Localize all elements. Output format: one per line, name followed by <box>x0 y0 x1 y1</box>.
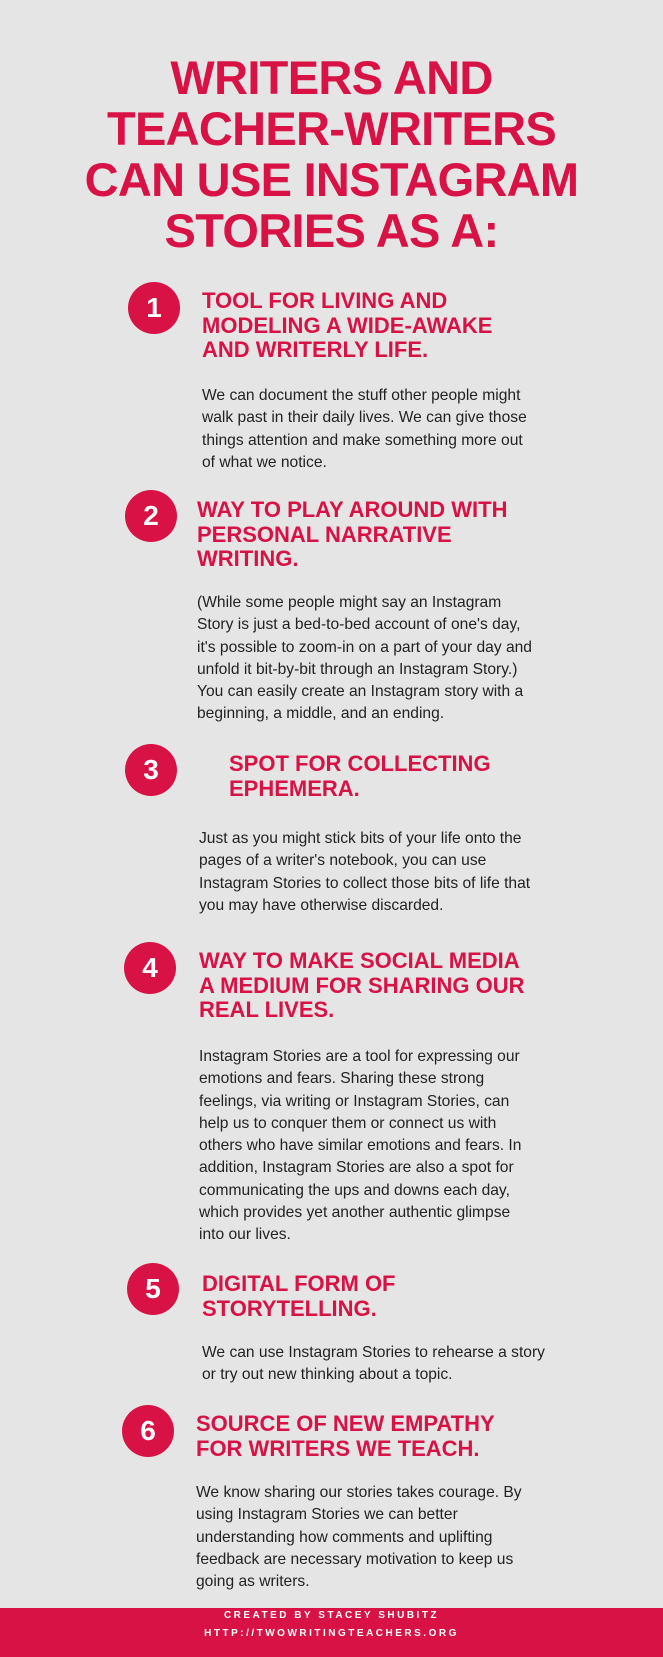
icon: number 5 <box>127 1263 179 1315</box>
body 2: (While some people might say an Instagram <box>197 594 501 611</box>
heading 4: WAY TO MAKE SOCIAL MEDIA <box>199 948 520 973</box>
body 3 <box>199 830 530 914</box>
body 4: addition, Instagram Stories are also a spot for <box>199 1159 514 1176</box>
footer <box>0 1608 663 1657</box>
body 2 <box>197 594 532 722</box>
icon: number 5: 5 <box>145 1273 161 1304</box>
icon: number 2: 2 <box>143 500 159 531</box>
body 6: using Instagram Stories we can better <box>196 1506 458 1523</box>
icon: number 1: 1 <box>146 292 162 323</box>
title: WRITERS AND <box>170 51 493 104</box>
icon: number 4: 4 <box>142 952 158 983</box>
heading 6: FOR WRITERS WE TEACH. <box>196 1436 480 1460</box>
body 1: We can document the stuff other people might <box>202 387 520 404</box>
body 6: We know sharing our stories takes courage. By <box>196 1484 522 1501</box>
body 4: which provides yet another authentic glimpse <box>199 1204 510 1221</box>
heading 6 <box>196 1411 495 1460</box>
body 4: Instagram Stories are a tool for expressing our <box>199 1048 520 1065</box>
body 2: You can easily create an Instagram story with a <box>197 683 523 700</box>
body 4: help us to conquer them or connect us with <box>199 1115 496 1132</box>
icon: number 4 <box>124 942 176 994</box>
icon: number 1 <box>128 282 180 334</box>
body 2: it's possible to zoom-in on a part of your day and <box>197 639 532 656</box>
heading 2: PERSONAL NARRATIVE <box>197 522 452 546</box>
heading 4: REAL LIVES. <box>199 997 334 1022</box>
heading 2: WAY TO PLAY AROUND WITH <box>197 497 508 522</box>
heading 6: SOURCE OF NEW EMPATHY <box>196 1411 495 1436</box>
heading 1 <box>202 288 492 362</box>
title: TEACHER-WRITERS <box>107 102 556 155</box>
title <box>85 51 578 257</box>
body 5: or try out new thinking about a topic. <box>202 1366 453 1383</box>
heading 5: DIGITAL FORM OF <box>202 1271 396 1296</box>
body 6: understanding how comments and uplifting <box>196 1529 492 1546</box>
body 4: emotions and fears. Sharing these strong <box>199 1070 484 1087</box>
heading 2: WRITING. <box>197 546 298 571</box>
body 5 <box>202 1344 545 1383</box>
icon: number 6 <box>122 1405 174 1457</box>
body 3: Just as you might stick bits of your life onto the <box>199 830 521 847</box>
title: CAN USE INSTAGRAM <box>85 153 578 206</box>
body 5: We can use Instagram Stories to rehearse a story <box>202 1344 545 1361</box>
footer: CREATED BY STACEY SHUBITZ <box>224 1610 439 1621</box>
heading 2 <box>197 497 508 571</box>
icon: number 3: 3 <box>143 754 159 785</box>
icon: number 2 <box>125 490 177 542</box>
body 1: of what we notice. <box>202 454 327 471</box>
body 2: unfold it bit-by-bit through an Instagram Story.) <box>197 661 517 678</box>
title: STORIES AS A: <box>165 204 498 257</box>
body 6: going as writers. <box>196 1573 310 1590</box>
heading 1: MODELING A WIDE-AWAKE <box>202 312 492 338</box>
heading 4 <box>199 948 525 1022</box>
body 4: into our lives. <box>199 1226 291 1243</box>
body 6: feedback are necessary motivation to keep us <box>196 1551 513 1568</box>
heading 5 <box>202 1271 396 1320</box>
body 2: Story is just a bed-to-bed account of one's day, <box>197 616 520 633</box>
body 4 <box>199 1048 521 1243</box>
heading 4: A MEDIUM FOR SHARING OUR <box>199 972 525 998</box>
heading 1: TOOL FOR LIVING AND <box>202 288 447 313</box>
body 3: you may have otherwise discarded. <box>199 897 443 914</box>
footer: HTTP://TWOWRITINGTEACHERS.ORG <box>204 1628 459 1639</box>
body 3: pages of a writer's notebook, you can use <box>199 852 486 869</box>
heading 3: SPOT FOR COLLECTING <box>229 751 491 776</box>
body 4: others who have similar emotions and fears. In <box>199 1137 521 1154</box>
body 4: communicating the ups and downs each day, <box>199 1182 510 1199</box>
heading 3 <box>229 751 491 800</box>
body 1: things attention and make something more out <box>202 432 523 449</box>
body 4: feelings, via writing or Instagram Stories, can <box>199 1093 509 1110</box>
body 1: walk past in their daily lives. We can give those <box>202 409 527 426</box>
heading 3: EPHEMERA. <box>229 776 360 800</box>
heading 1: AND WRITERLY LIFE. <box>202 337 428 362</box>
heading 5: STORYTELLING. <box>202 1296 377 1320</box>
icon: number 6: 6 <box>140 1415 156 1446</box>
body 2: beginning, a middle, and an ending. <box>197 705 444 722</box>
icon: number 3 <box>125 744 177 796</box>
body 1 <box>202 387 527 471</box>
body 6 <box>196 1484 522 1590</box>
body 3: Instagram Stories to collect those bits of life that <box>199 875 530 892</box>
